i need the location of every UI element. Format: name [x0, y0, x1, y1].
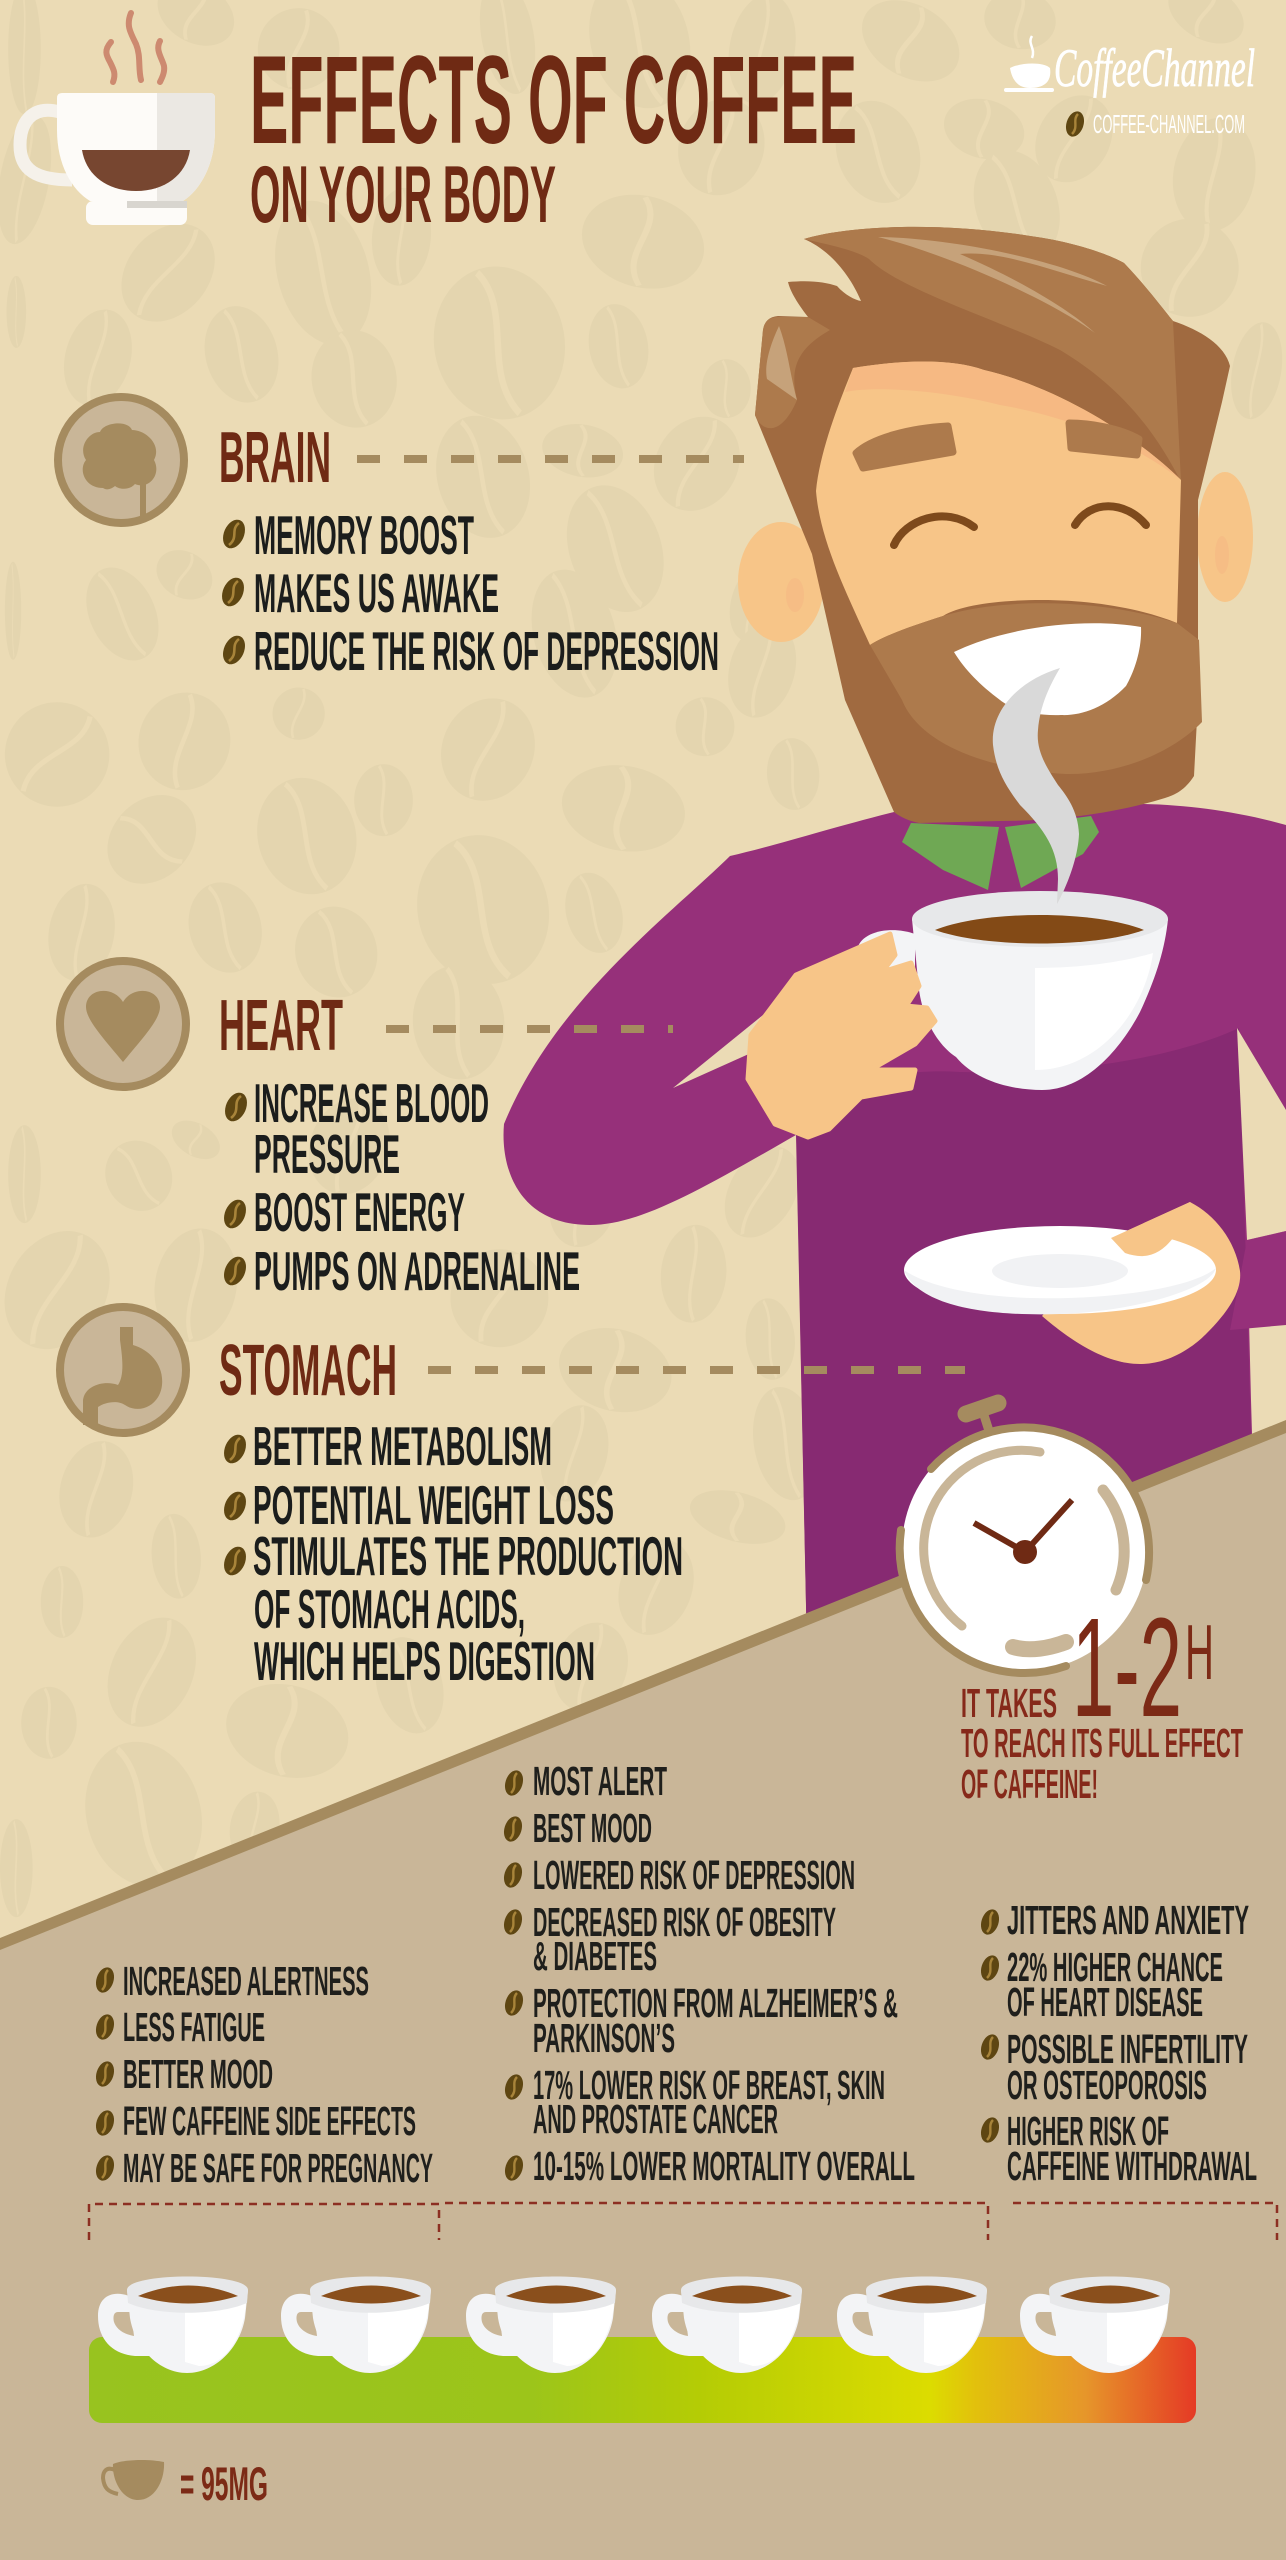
list: moderate caffeine benefits: PROTECTION FROM ALZHEIMER’S & [533, 1980, 898, 2026]
man: smiling eyes [894, 506, 1146, 545]
list: moderate caffeine benefits: MOST ALERT [533, 1758, 667, 1804]
icon: brain [58, 397, 184, 523]
callout: time to full effect: IT TAKES [961, 1680, 1057, 1726]
section: heart [60, 961, 673, 1302]
list: moderate caffeine benefits: LOWERED RISK OF DEPRESSION [533, 1852, 855, 1898]
coffee cups row [98, 2276, 1170, 2373]
man: hair and beard [755, 227, 1230, 823]
title [250, 31, 857, 240]
list: POTENTIAL WEIGHT LOSS [253, 1474, 614, 1536]
section: brain [58, 397, 744, 682]
legend: one cup equals 95mg [103, 2457, 268, 2510]
title: ON YOUR BODY [250, 150, 556, 240]
lower panel: caffeine dosage background [0, 1420, 1286, 2560]
icon: heart [60, 961, 186, 1087]
man: face [816, 362, 1181, 645]
list: low caffeine benefits: FEW CAFFEINE SIDE EFFECTS [123, 2098, 416, 2144]
section: stomach [60, 1307, 965, 1692]
background coffee bean pattern [0, 0, 1286, 1917]
callout: time to full effect: H [1185, 1608, 1214, 1696]
list: low caffeine benefits: BETTER MOOD [123, 2051, 273, 2097]
list: WHICH HELPS DIGESTION [254, 1630, 595, 1692]
list: STIMULATES THE PRODUCTION [253, 1525, 683, 1587]
list: OF STOMACH ACIDS, [254, 1578, 525, 1640]
hand holding cup [748, 934, 935, 1137]
list: low caffeine benefits: LESS FATIGUE [123, 2004, 265, 2050]
man: open mouth [954, 623, 1141, 715]
section: heart: PUMPS ON ADRENALINE [254, 1240, 580, 1302]
list: low caffeine benefits: INCREASED ALERTNESS [123, 1958, 369, 2004]
connector line [357, 455, 744, 463]
list: low caffeine benefits [93, 1958, 433, 2191]
man: green collar [902, 816, 1099, 890]
steam from cup [993, 668, 1079, 904]
caffeine gradient bar [89, 2337, 1196, 2423]
list: MEMORY BOOST [254, 504, 474, 566]
man: hand holding saucer [1042, 1202, 1240, 1364]
man: ears [738, 472, 1253, 642]
list: moderate caffeine benefits: BEST MOOD [533, 1805, 652, 1851]
list: MAKES US AWAKE [254, 562, 499, 624]
section: brain: BRAIN [219, 418, 331, 498]
icon: steam [106, 13, 164, 82]
stopwatch [900, 1403, 1149, 1673]
list: INCREASE BLOOD [254, 1072, 489, 1134]
section: stomach: STOMACH [219, 1331, 397, 1411]
list: moderate caffeine benefits: PARKINSON’S [533, 2015, 675, 2061]
list: PRESSURE [254, 1123, 400, 1185]
list [220, 1072, 580, 1302]
list: moderate caffeine benefits: DECREASED RISK OF OBESITY [533, 1899, 836, 1945]
man: lighter beard [870, 603, 1202, 774]
connector line [386, 1025, 673, 1033]
list: BETTER METABOLISM [253, 1415, 552, 1477]
text: MAY BE SAFE FOR PREGNANCY [123, 2145, 433, 2191]
saucer [904, 1202, 1216, 1314]
icon: stomach [60, 1307, 186, 1433]
list: moderate caffeine benefits: AND PROSTATE CANCER [533, 2096, 778, 2142]
list: moderate caffeine benefits: & DIABETES [533, 1933, 657, 1979]
list [220, 1415, 683, 1692]
header coffee cup icon [20, 13, 215, 225]
section: brain: REDUCE THE RISK OF DEPRESSION [254, 620, 719, 682]
list: moderate caffeine benefits [501, 1758, 915, 2189]
man: sweater [504, 804, 1286, 1700]
list: BOOST ENERGY [254, 1181, 465, 1243]
callout: time to full effect: OF CAFFEINE! [961, 1761, 1098, 1807]
dashed range brackets [89, 2203, 1277, 2240]
list: moderate caffeine benefits: 17% LOWER RISK OF BREAST, SKIN [533, 2062, 885, 2108]
heading: HEART [219, 986, 343, 1066]
illustration: man drinking coffee [504, 227, 1286, 1700]
callout: time to full effect: 1-2 [1072, 1588, 1182, 1746]
list: moderate caffeine benefits: 10-15% LOWER MORTALITY OVERALL [533, 2143, 915, 2189]
connector line [428, 1366, 965, 1374]
callout: time to full effect [961, 1588, 1243, 1807]
list [218, 504, 719, 682]
list: high caffeine risks [978, 1897, 1257, 2189]
man: eyebrows [856, 423, 1139, 468]
big coffee cup [857, 891, 1168, 1090]
legend: one cup equals 95mg: = 95MG [180, 2457, 268, 2510]
logo: CoffeeChannel [1006, 36, 1255, 139]
